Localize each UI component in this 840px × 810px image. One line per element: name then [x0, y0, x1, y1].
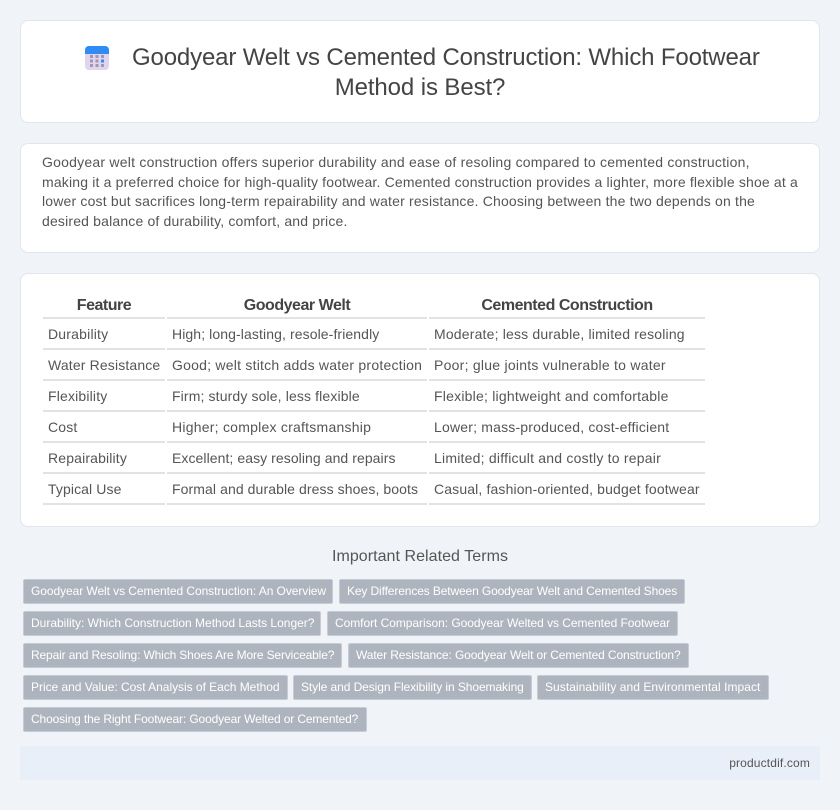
intro text: making it a preferred choice for high-quality footwear. Cemented construction provides a lighter, more flexible shoe at a — [42, 174, 798, 190]
table rows: Excellent; easy resoling and repairs — [172, 450, 396, 466]
related term tags: Comfort Comparison: Goodyear Welted vs Cemented Footwear — [335, 616, 670, 630]
related term tags: Style and Design Flexibility in Shoemaking — [301, 680, 524, 694]
intro text: desired balance of durability, comfort, and price. — [42, 213, 348, 229]
related term tags: Repair and Resoling: Which Shoes Are More Serviceable? — [31, 648, 334, 662]
table rows: High; long-lasting, resole-friendly — [172, 326, 379, 342]
title text: Method is Best? — [335, 74, 505, 101]
intro text — [42, 154, 798, 229]
related term tags: Key Differences Between Goodyear Welt and Cemented Shoes — [347, 584, 677, 598]
title text: Goodyear Welt vs Cemented Construction: Which Footwear — [132, 44, 760, 71]
table rows: Water Resistance — [48, 357, 160, 373]
related term tags: Sustainability and Environmental Impact — [545, 680, 760, 694]
related term tags: Choosing the Right Footwear: Goodyear Welted or Cemented? — [31, 712, 358, 726]
table rows: Flexible; lightweight and comfortable — [434, 388, 669, 404]
related term tags: Durability: Which Construction Method Lasts Longer? — [31, 616, 314, 630]
table rows — [43, 317, 705, 505]
related term tags: Goodyear Welt vs Cemented Construction: An Overview — [31, 584, 326, 598]
related term tags — [23, 579, 769, 732]
table rows: Durability — [48, 326, 108, 342]
table rows: Casual, fashion-oriented, budget footwear — [434, 481, 700, 497]
footer bar — [20, 746, 820, 780]
intro panel — [20, 143, 820, 253]
table header: Cemented Construction — [481, 297, 653, 314]
intro text: lower cost but sacrifices long-term repairability and water resistance. Choosing between the two depends on the — [42, 193, 755, 209]
footer source: productdif.com — [729, 756, 810, 770]
related term tags: Water Resistance: Goodyear Welt or Cemented Construction? — [356, 648, 681, 662]
icon: calendar — [85, 46, 109, 70]
intro text: Goodyear welt construction offers superior durability and ease of resoling compared to cemented construction, — [42, 154, 750, 170]
table rows: Repairability — [48, 450, 127, 466]
related terms heading: Important Related Terms — [332, 548, 508, 565]
table header: Goodyear Welt — [244, 297, 350, 314]
title card — [20, 20, 820, 123]
table rows: Formal and durable dress shoes, boots — [172, 481, 418, 497]
table rows: Moderate; less durable, limited resoling — [434, 326, 685, 342]
title text — [132, 44, 760, 101]
comparison table panel — [20, 273, 820, 527]
table rows: Firm; sturdy sole, less flexible — [172, 388, 360, 404]
table rows: Flexibility — [48, 388, 107, 404]
table header — [77, 297, 653, 314]
table rows: Lower; mass-produced, cost-efficient — [434, 419, 669, 435]
related term tags: Price and Value: Cost Analysis of Each Method — [31, 680, 280, 694]
table rows: Higher; complex craftsmanship — [172, 419, 371, 435]
table rows: Poor; glue joints vulnerable to water — [434, 357, 666, 373]
table header: Feature — [77, 297, 131, 314]
table rows: Cost — [48, 419, 77, 435]
table rows: Limited; difficult and costly to repair — [434, 450, 661, 466]
table rows: Typical Use — [48, 481, 121, 497]
table rows: Good; welt stitch adds water protection — [172, 357, 422, 373]
